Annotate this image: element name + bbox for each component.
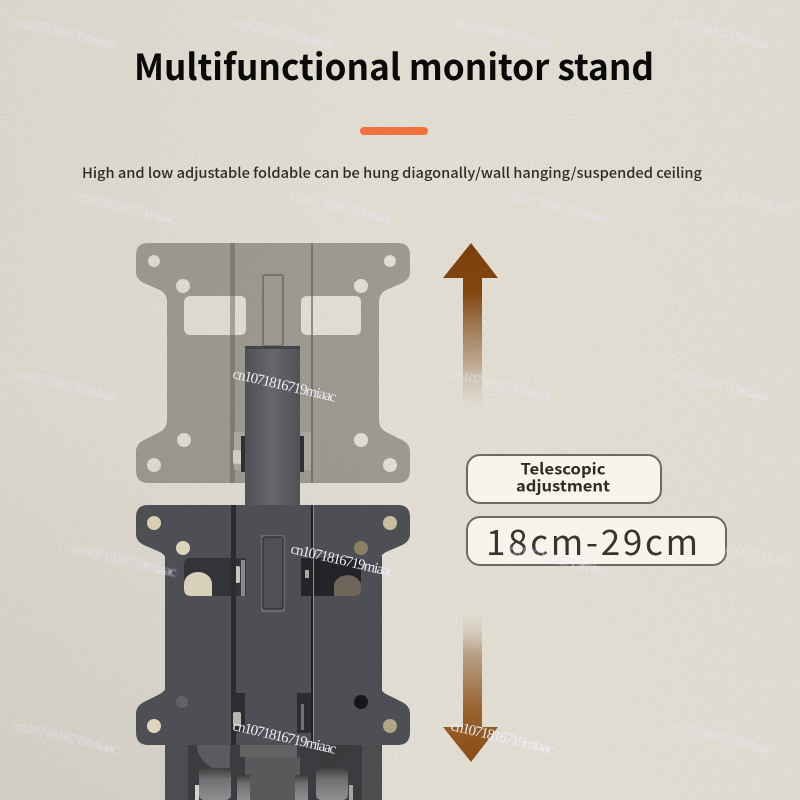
watermarks: cn1071816719miaac [13,718,120,758]
watermarks: cn10718167 [724,188,796,220]
watermarks: cn1071816719miaac [449,718,556,758]
label: telescopic adjustment: adjustment [516,474,611,496]
watermarks: cn1071816719miaac [667,14,774,54]
folding arm rollers [195,768,353,800]
watermarks: cn1071816719miaac [71,188,178,228]
telescopic column [233,346,311,508]
mounting holes [147,516,397,733]
wall mount base behind plate [165,556,382,800]
label: range 18cm-29cm: 18cm-29cm [486,515,698,566]
watermarks: cn1071816719miaac [13,366,120,406]
orange accent bar [360,127,428,135]
watermarks: cn1071816719miaac [667,718,774,758]
handle recess [261,535,285,612]
label: telescopic adjustment [467,455,661,503]
lower mounting plate [136,505,410,745]
label: telescopic adjustment: Telescopic [520,458,606,480]
upper ghost position of mounting plate [136,243,410,483]
subtitle: High and low adjustable foldable can be hung diagonally/wall hanging/suspended ceiling [82,163,702,183]
watermarks: cn1071816719miaac [13,14,120,54]
title: Multifunctional monitor stand [134,39,654,91]
watermarks: cn1071816719miaac [506,188,613,228]
right window with wall visible [301,558,361,596]
watermarks: cn1071816719miaac [507,541,614,581]
watermarks: cn1071816719miaac [449,14,556,54]
watermarks: cn1071816719miaac [231,366,338,406]
arrow down [443,612,498,762]
watermarks: cn10718167 [724,541,796,573]
watermarks: cn1071816719miaac [449,366,556,406]
watermarks: cn1071816719miaac [71,541,178,581]
watermarks: cn1071816719miaac [289,541,396,581]
lower latch slots [233,693,311,733]
watermarks: cn1071816719miaac [666,366,773,406]
watermarks: cn1071816719miaac [289,188,396,228]
arrow up [443,243,498,410]
watermarks: cn1071816719miaac [231,14,338,54]
watermarks: cn1071816719miaac [231,718,338,758]
left window with wall visible [184,558,246,596]
